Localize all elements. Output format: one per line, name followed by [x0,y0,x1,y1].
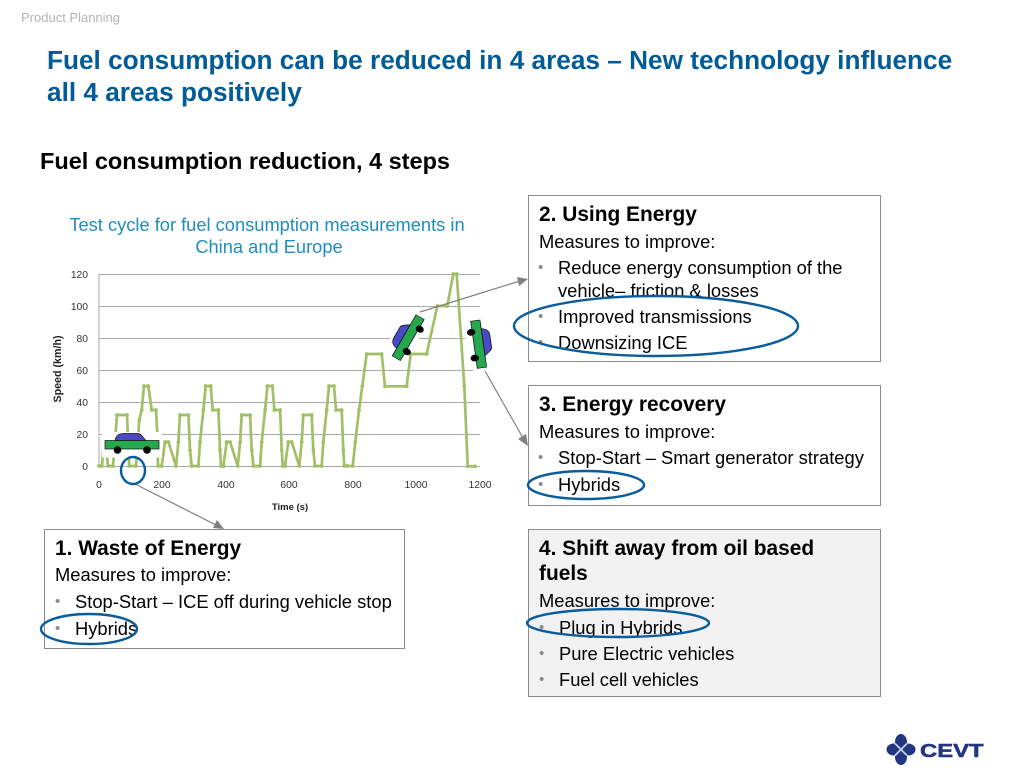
heading: waste of energy: 1. Waste of Energy [55,537,241,560]
section label: Product Planning [21,10,120,25]
list: energy measures: Downsizing ICE [558,332,687,353]
chart title [69,214,465,257]
heading: shift away from oil: 4. Shift away from oil based [539,537,814,560]
list: waste measures [55,591,392,639]
axis labels: 800 [344,480,362,491]
title: all 4 areas positively [47,76,302,106]
list: recovery measures [538,447,864,495]
highlight: transmissions and ICE oval [514,296,798,356]
text: measures: Measures to improve: [539,590,715,611]
axis labels: 1000 [405,480,428,491]
list: alternative fuels [539,617,734,690]
axis labels: 60 [77,366,88,377]
list: waste measures: • [55,620,60,637]
line chart: speed over time [52,270,492,513]
list: alternative fuels: • [539,619,544,636]
text: measures: Measures to improve: [539,231,715,252]
list: energy measures: Improved transmissions [558,306,752,327]
list: energy measures: vehicle– friction & losses [558,280,759,301]
list: alternative fuels: Plug in Hybrids [559,617,682,638]
list: energy measures: • [538,334,543,351]
chart title: China and Europe [195,236,343,257]
data line [99,274,475,466]
line chart: speed over time: Time (s) [272,502,308,513]
list: energy measures: • [538,259,543,276]
arrow: idle to waste of energy [133,483,224,529]
panel: shift away from oil [528,529,881,697]
highlight: hybrids oval (waste) [41,614,137,644]
title: Fuel consumption can be reduced in 4 areas – New technology influence [47,45,952,75]
heading: energy recovery: 3. Energy recovery [539,393,726,416]
title [47,45,952,106]
axis labels: 1200 [469,480,492,491]
list: waste measures: Stop-Start – ICE off during vehicle stop [75,591,392,612]
text: measures: Measures to improve: [539,421,715,442]
icon: car braking [465,319,494,369]
axis labels: 20 [77,430,88,441]
chart title: Test cycle for fuel consumption measurements in [69,214,465,235]
axis labels: 0 [82,462,88,473]
axis labels: 100 [71,302,88,313]
logo: CEVT: CEVT [920,741,984,761]
highlight: idle period oval [121,457,145,484]
heading: shift away from oil [539,537,814,585]
list: recovery measures: • [538,449,543,466]
heading: using energy: 2. Using Energy [539,203,697,226]
axis labels: 400 [217,480,235,491]
arrow: braking to energy recovery [485,371,528,446]
axis labels: 0 [96,480,102,491]
list: waste measures: Hybrids [75,618,137,639]
axis labels [71,270,492,491]
list: recovery measures: • [538,476,543,493]
panel: using energy [528,195,881,362]
panel: waste of energy [44,529,405,649]
subheading: Fuel consumption reduction, 4 steps [40,148,450,174]
panel: energy recovery [528,385,881,506]
list: alternative fuels: Fuel cell vehicles [559,669,699,690]
line chart: speed over time: Speed (km/h) [52,335,64,403]
axis labels: 80 [77,334,88,345]
text: measures: Measures to improve: [55,564,231,585]
axis labels: 200 [153,480,171,491]
list: energy measures: • [538,308,543,325]
grid [99,274,480,466]
axis labels: 40 [77,398,88,409]
list: recovery measures: Hybrids [558,474,620,495]
list: alternative fuels: • [539,645,544,662]
icon: car at idle [105,434,159,454]
list: energy measures: Reduce energy consumption of the [558,257,843,278]
white cut-out behind idle car [102,432,162,458]
axis labels: 120 [71,270,88,281]
highlight: hybrids oval (recovery) [528,471,644,499]
list: waste measures: • [55,593,60,610]
list: alternative fuels: • [539,671,544,688]
list: alternative fuels: Pure Electric vehicles [559,643,734,664]
list: energy measures [538,257,843,353]
arrow: acceleration to using energy [420,277,528,312]
list: recovery measures: Stop-Start – Smart generator strategy [558,447,864,468]
icon: car accelerating [386,311,429,363]
heading: shift away from oil: fuels [539,562,588,585]
axis labels: 600 [280,480,298,491]
highlight: plug in hybrids oval [527,609,709,637]
logo: CEVT [886,734,984,765]
gridline gaps around cars [390,333,481,374]
